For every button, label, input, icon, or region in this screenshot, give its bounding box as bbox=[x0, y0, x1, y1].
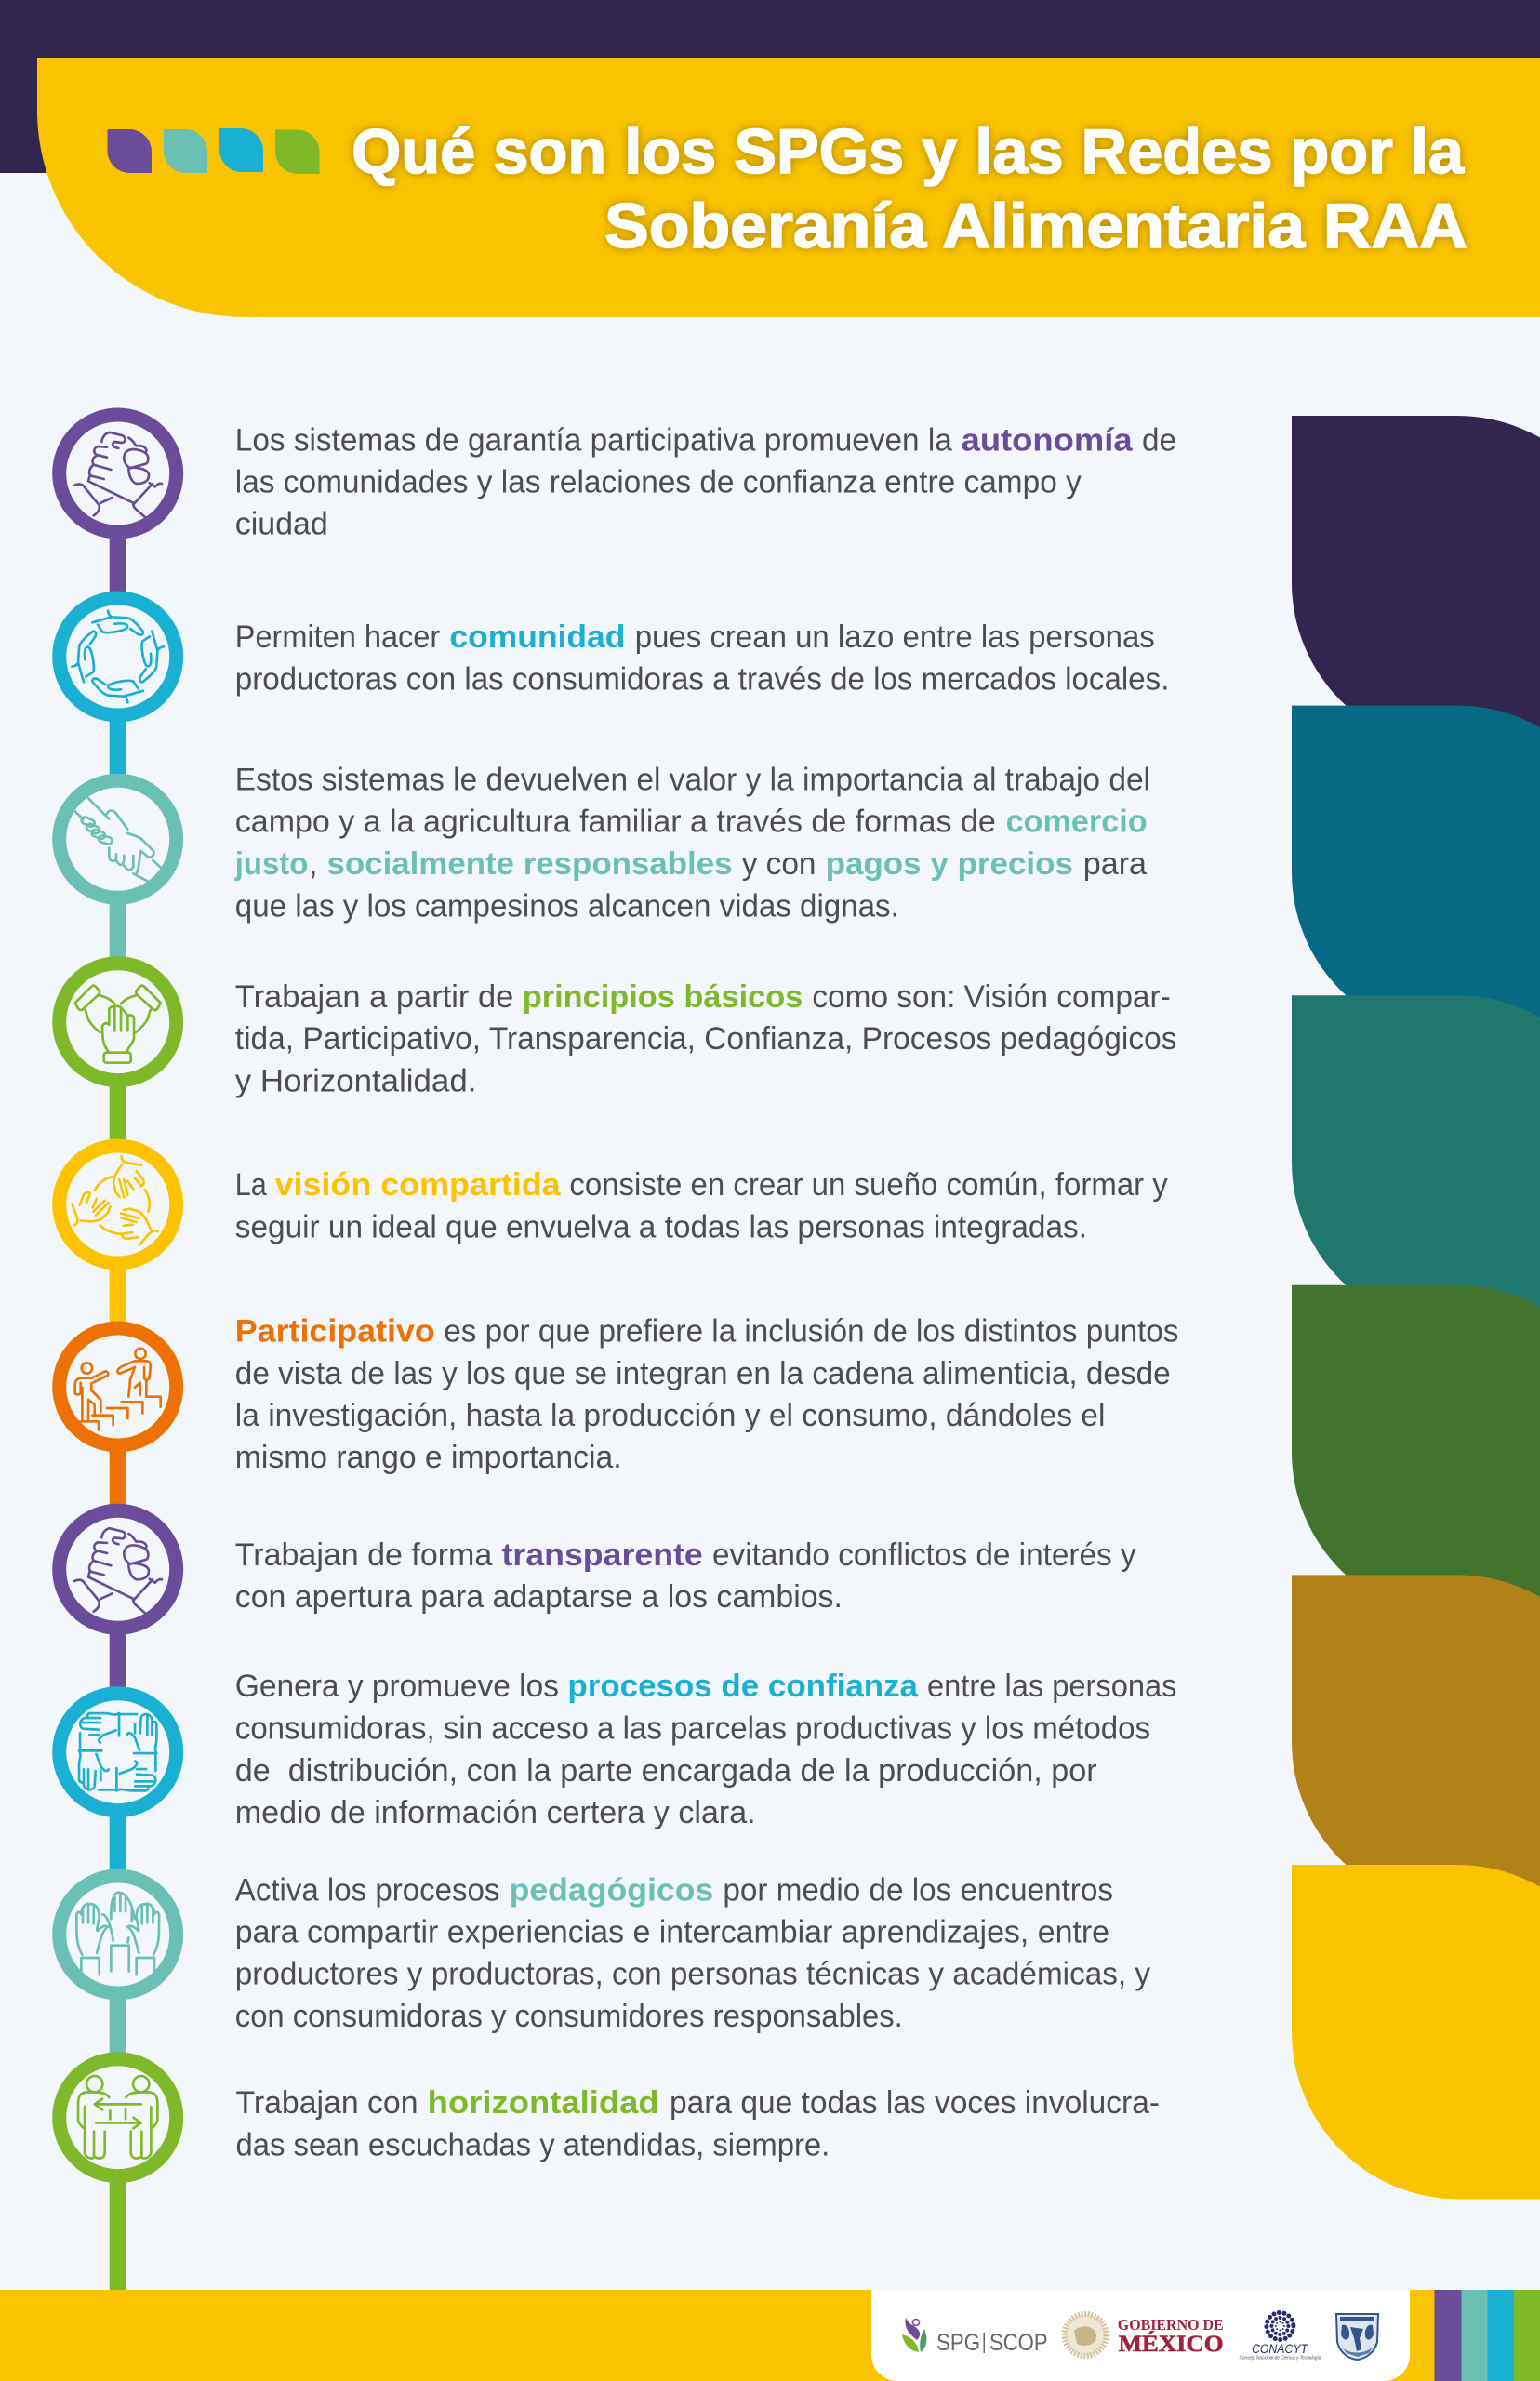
text block 7: Trabajan de forma bbox=[235, 1537, 492, 1573]
header leaf icons bbox=[108, 128, 320, 174]
text block 4: y Horizontalidad. bbox=[235, 1063, 476, 1098]
text block 2: Permiten hacer bbox=[235, 619, 440, 655]
text block 8 bbox=[235, 1669, 1177, 1830]
footer bar bbox=[0, 2290, 1540, 2381]
text block 6: la investigación, hasta la producción y el consumo, dándoles el bbox=[235, 1398, 1105, 1433]
text block 8: consumidoras, sin acceso a las parcelas productivas y los métodos bbox=[235, 1711, 1150, 1747]
header dark band bbox=[0, 0, 1540, 173]
text block 9: para compartir experiencias e intercambiar aprendizajes, entre bbox=[235, 1915, 1109, 1950]
text block 5: consiste en crear un sueño común, formar y bbox=[569, 1167, 1168, 1203]
text block 9: pedagógicos bbox=[510, 1873, 713, 1909]
text block 4: Trabajan a partir de bbox=[235, 979, 513, 1015]
logo: CONACYT: CONACYT bbox=[1252, 2341, 1308, 2356]
text block 8: Genera y promueve los bbox=[235, 1669, 559, 1704]
logo: SPG SCOP: SCOP bbox=[989, 2330, 1048, 2356]
text block 3: comercio bbox=[1006, 805, 1148, 840]
logo: UNAM shield bbox=[1336, 2314, 1378, 2360]
icon: clasped hands, fair trade bbox=[60, 780, 177, 898]
text block 6: mismo rango e importancia. bbox=[235, 1440, 622, 1475]
text block 5: visión compartida bbox=[275, 1167, 562, 1203]
text block 5 bbox=[235, 1167, 1168, 1244]
text block 6: es por que prefiere la inclusión de los distintos puntos bbox=[444, 1314, 1179, 1350]
text block 7: con apertura para adaptarse a los cambios. bbox=[235, 1579, 843, 1615]
header yellow panel bbox=[37, 58, 1540, 317]
text block 1: autonomía bbox=[962, 422, 1134, 458]
title bbox=[352, 116, 1467, 261]
text block 3: para bbox=[1083, 846, 1147, 882]
logo: Gobierno de México: GOBIERNO DE bbox=[1118, 2316, 1224, 2334]
text block 7: transparente bbox=[502, 1537, 703, 1573]
icon: three hands together, principles bbox=[60, 964, 177, 1081]
text block 3: justo bbox=[234, 846, 308, 882]
icon: people on stairs, participative bbox=[60, 1328, 177, 1445]
logo: CONACYT bbox=[1239, 2312, 1321, 2361]
text block 2 bbox=[235, 619, 1169, 698]
text block 2: productoras con las consumidoras a través de los mercados locales. bbox=[235, 662, 1169, 698]
text block 3: campo y a la agricultura familiar a través de formas de bbox=[235, 805, 996, 840]
text block 3: pagos y precios bbox=[826, 846, 1073, 882]
text block 3 bbox=[234, 763, 1150, 924]
text block 10: Trabajan con bbox=[236, 2085, 418, 2121]
logo: Gobierno de México: MÉXICO bbox=[1119, 2331, 1224, 2357]
text block 6: Participativo bbox=[235, 1314, 435, 1350]
title: Qué son los SPGs y las Redes por la bbox=[352, 116, 1465, 187]
text block 4 bbox=[235, 979, 1177, 1098]
text block 10 bbox=[236, 2085, 1160, 2163]
text block 9: con consumidoras y consumidores responsables. bbox=[235, 1999, 903, 2034]
text block 2: pues crean un lazo entre las personas bbox=[635, 619, 1155, 655]
text block 9 bbox=[235, 1873, 1150, 2034]
text block 1: de bbox=[1142, 422, 1176, 458]
icon: handshake, autonomy bbox=[60, 415, 177, 532]
text block 1 bbox=[235, 422, 1176, 541]
logo: SPG SCOP bbox=[902, 2318, 1048, 2356]
text block 3: que las y los campesinos alcancen vidas dignas. bbox=[235, 888, 899, 924]
title: Soberanía Alimentaria RAA bbox=[604, 191, 1467, 261]
text block 4: como son: Visión compar- bbox=[812, 979, 1171, 1015]
text block 3: socialmente responsables bbox=[327, 846, 733, 882]
text block 1: las comunidades y las relaciones de confianza entre campo y bbox=[235, 465, 1082, 500]
text block 9: por medio de los encuentros bbox=[723, 1873, 1113, 1909]
text block 1: ciudad bbox=[235, 506, 328, 541]
text block 3: Estos sistemas le devuelven el valor y la importancia al trabajo del bbox=[235, 763, 1150, 798]
text block 4: tida, Participativo, Transparencia, Confianza, Procesos pedagógicos bbox=[235, 1021, 1177, 1057]
text block 9: productores y productoras, con personas técnicas y académicas, y bbox=[235, 1957, 1150, 1992]
timeline connector lines bbox=[110, 473, 126, 2290]
text block 10: das sean escuchadas y atendidas, siempre. bbox=[236, 2128, 830, 2163]
logo: CONACYT: Consejo Nacional de Ciencia y Tecnología bbox=[1239, 2356, 1321, 2361]
icon: handshake, transparency bbox=[60, 1510, 177, 1628]
text block 8: entre las personas bbox=[927, 1669, 1177, 1704]
text block 5: seguir un ideal que envuelva a todas las personas integradas. bbox=[235, 1209, 1087, 1244]
text block 3: y con bbox=[742, 846, 816, 882]
text block 9: Activa los procesos bbox=[235, 1873, 499, 1909]
text block 7 bbox=[235, 1537, 1136, 1615]
text block 5: La bbox=[235, 1167, 267, 1203]
decorative right leaves bbox=[1292, 416, 1540, 2199]
footer logo panel bbox=[871, 2290, 1410, 2381]
text block 8: medio de información certera y clara. bbox=[235, 1795, 756, 1830]
text block 10: para que todas las voces involucra- bbox=[670, 2085, 1160, 2121]
logo: SPG SCOP: SPG bbox=[936, 2330, 980, 2356]
text block 7: evitando conflictos de interés y bbox=[712, 1537, 1136, 1573]
icon: two people exchanging, horizontality bbox=[60, 2059, 177, 2176]
logo: Gobierno de México bbox=[1064, 2314, 1224, 2357]
text block 10: horizontalidad bbox=[428, 2085, 659, 2121]
text block 6: de vista de las y los que se integran en la cadena alimenticia, desde bbox=[235, 1356, 1171, 1391]
text block 1: Los sistemas de garantía participativa promueven la bbox=[235, 422, 952, 458]
text block 4: principios básicos bbox=[523, 979, 803, 1015]
text block 2: comunidad bbox=[449, 619, 625, 655]
text block 8: procesos de confianza bbox=[567, 1669, 919, 1704]
text block 8: de distribución, con la parte encargada de la producción, por bbox=[235, 1753, 1097, 1789]
icon: three hands in a circle, shared vision bbox=[60, 1146, 177, 1263]
icon: four linked hands, trust bbox=[60, 1694, 177, 1811]
icon: raised hands, pedagogy bbox=[60, 1876, 177, 1993]
text block 6 bbox=[235, 1314, 1179, 1475]
text block 3: , bbox=[309, 846, 317, 882]
icon: ring of hands, community bbox=[60, 598, 177, 715]
